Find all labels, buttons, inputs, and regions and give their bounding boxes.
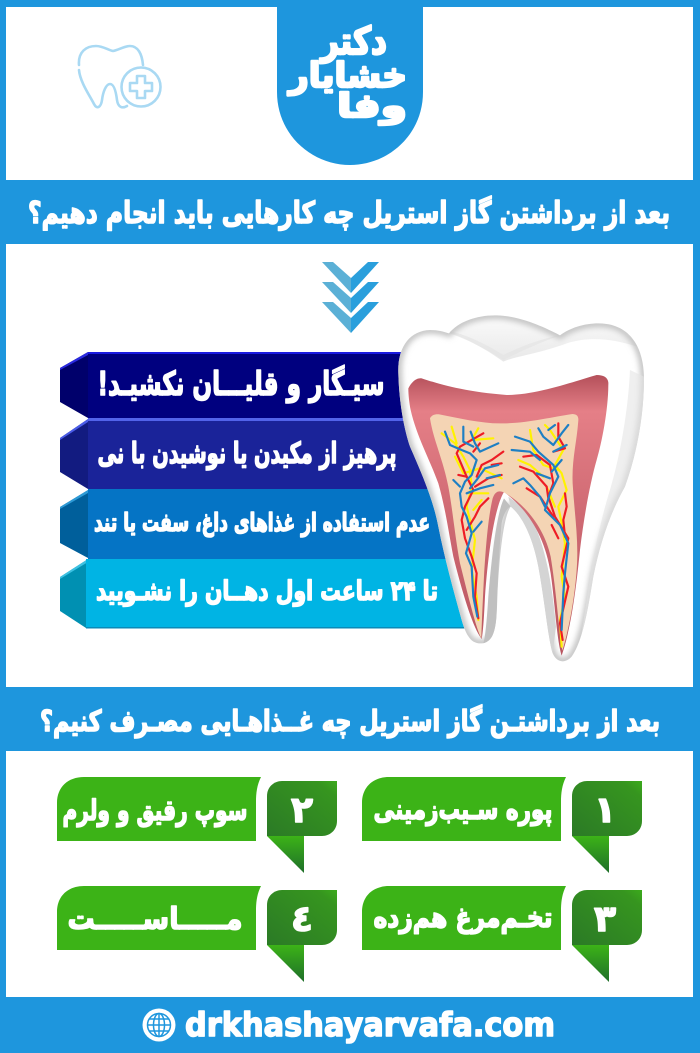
food item 2: سوپ رقیق و ولرم [62, 794, 248, 827]
illustration: molar cross-section [398, 315, 644, 662]
bar 2: no sucking: پرهیز از مکیدن یا نوشیدن با نی [98, 436, 396, 471]
food item 4: ٤ [291, 899, 313, 940]
logo text [287, 19, 407, 126]
logo text: وفا [337, 86, 407, 126]
logo badge [277, 0, 423, 165]
bar 1: no smoking [60, 352, 418, 418]
back cusps [458, 326, 632, 362]
food item 2: ۲ [291, 790, 313, 831]
panel: recommended foods [6, 751, 693, 997]
panel: after-extraction actions [6, 244, 693, 687]
food item 3 [362, 886, 642, 982]
tooth enamel [398, 315, 644, 662]
nerves: yellow [442, 425, 567, 647]
food item 1: ۱ [594, 790, 616, 831]
nerve network [442, 423, 568, 647]
logo text: خشایار [287, 56, 407, 96]
nerves: red [457, 423, 568, 640]
bar 3: no hot food: عدم استفاده از غذاهای داغ، سفت یا تند [94, 508, 430, 537]
right side enamel shade [582, 370, 644, 632]
enamel rim shading [398, 315, 644, 661]
food item 4: مـــــاســـــت [68, 902, 242, 937]
bar 4: no rinsing: تا ۲۴ ساعت اول دهــان را نشـویید [96, 576, 438, 607]
bar 4: no rinsing [60, 559, 470, 628]
food item 1: پوره سـیب‌زمینی [374, 793, 552, 826]
panel: top header [6, 7, 693, 180]
food item 3: ۳ [594, 899, 616, 940]
food item 3: تخـم‌مرغ هم‌زده [374, 901, 552, 934]
food item 2 [57, 777, 337, 873]
website address: drkhashayarvafa.com [185, 1005, 555, 1044]
icon: tooth with plus [79, 46, 160, 107]
dentin [408, 375, 608, 656]
nerves: blue [445, 425, 568, 630]
food item 4 [57, 886, 337, 982]
bar 3: no hot food [60, 489, 448, 559]
bar 2: no sucking [60, 418, 428, 489]
icon: triple chevron arrow [322, 262, 379, 333]
bar 1: no smoking: سیـگار و قلیـــان نکشیـد! [98, 364, 384, 404]
inner gap shading [483, 498, 511, 643]
pulp chamber [430, 414, 578, 651]
icon: globe [142, 1008, 176, 1042]
logo text: دکتر [319, 19, 387, 63]
footer: website [142, 1005, 555, 1044]
food item 1 [362, 777, 642, 873]
